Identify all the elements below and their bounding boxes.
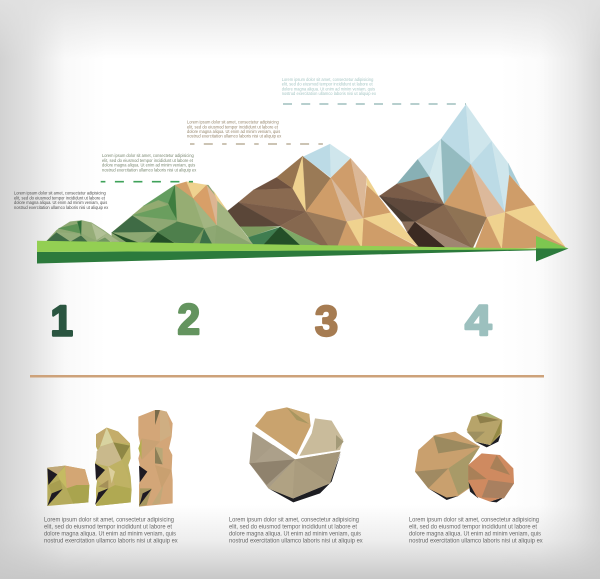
arrow: timeline axis [37,236,568,264]
text block: mountain 1 [14,191,109,210]
text block: mountain 4: dolore magna aliqua. Ut enim ad minim veniam, quis [282,86,375,91]
text block: mountain 2: dolore magna aliqua. Ut enim ad minim veniam, quis [102,163,195,168]
chart: rock bar chart [47,410,173,507]
pie shadow [268,453,341,502]
mountain 2: green hill with tan crest [112,182,253,245]
rock: small olive [467,412,502,447]
text block: mountain 1: Lorem ipsum dolor sit amet, consectetur adipisicing [14,191,106,196]
caption: rock cluster: nostrud exercitation ullamco laboris nisi ut aliquip ex [409,538,543,544]
text block: mountain 4: nostrud exercitation ullamco laboris nisi ut aliquip ex [282,91,377,96]
text block: mountain 4 [282,77,377,96]
text block: mountain 2: elit, sed do eiusmod tempor incididunt ut labore et [102,158,194,163]
mountain 3: snow cap and right face [303,144,418,248]
text block: mountain 1: nostrud exercitation ullamco laboris nisi ut aliquip ex [14,205,109,210]
number 4: 4 [465,297,492,345]
caption: pie chart: dolore magna aliqua. Ut enim ad minim veniam, quis [229,531,361,537]
number 2: 2 [178,296,200,344]
text block: mountain 3: Lorem ipsum dolor sit amet, consectetur adipisicing [187,119,279,124]
text block: mountain 1: dolore magna aliqua. Ut enim ad minim veniam, quis [14,200,107,205]
rock: orange [468,453,514,502]
text block: mountain 3: elit, sed do eiusmod tempor incididunt ut labore et [187,124,279,129]
mountain 1: small green hill [46,220,119,242]
caption: bar chart: Lorem ipsum dolor sit amet, consectetur adipisicing [44,518,174,524]
caption: rock cluster [409,518,543,544]
caption: pie chart [229,518,363,544]
dashed leader line: mountain 3 [190,143,332,145]
caption: pie chart: Lorem ipsum dolor sit amet, consectetur adipisicing [229,518,359,524]
rock: large tan [415,432,480,500]
text block: mountain 1: elit, sed do eiusmod tempor incididunt ut labore et [14,196,106,200]
caption: rock cluster: Lorem ipsum dolor sit amet, consectetur adipisicing [409,518,539,524]
green foothill between mountains 2 and 3 [240,227,323,247]
text block: mountain 2: nostrud exercitation ullamco laboris nisi ut aliquip ex [102,167,197,172]
caption: pie chart: elit, sed do eiusmod tempor incididunt ut labore et [229,525,357,531]
rock bar 3 [138,410,173,507]
rock bar 1 [47,466,89,506]
text block: mountain 3: dolore magna aliqua. Ut enim ad minim veniam, quis [187,129,280,134]
number 1: 1 [50,298,73,346]
caption: rock cluster: elit, sed do eiusmod tempor incididunt ut labore et [409,525,537,531]
rock bar 2 [95,428,132,506]
caption: bar chart: dolore magna aliqua. Ut enim ad minim veniam, quis [44,531,176,537]
dashed leader line: mountain 2 [101,181,193,183]
text block: mountain 3 [187,119,282,139]
pie slice: beige [299,418,344,456]
mountain 3: left brown face [227,156,340,246]
chart: cluster of three rocks [415,412,514,502]
text block: mountain 2 [102,153,197,172]
dashed leader line: mountain 4 [283,103,466,105]
caption: rock cluster: dolore magna aliqua. Ut enim ad minim veniam, quis [409,531,541,537]
text block: mountain 4: elit, sed do eiusmod tempor incididunt ut labore et [282,82,373,87]
caption: bar chart: elit, sed do eiusmod tempor incididunt ut labore et [44,525,172,531]
chart: rock pie chart [249,407,344,502]
section divider line [30,375,544,378]
pie slice: large grey [249,432,341,498]
caption: pie chart: nostrud exercitation ullamco laboris nisi ut aliquip ex [229,538,363,544]
pie slice: tan [255,407,311,455]
caption: bar chart [44,518,178,544]
text block: mountain 4: Lorem ipsum dolor sit amet, consectetur adipisicing [282,77,374,82]
mountain 4: tallest snow peak [379,104,565,249]
caption: bar chart: nostrud exercitation ullamco laboris nisi ut aliquip ex [44,538,178,544]
text block: mountain 3: nostrud exercitation ullamco laboris nisi ut aliquip ex [187,134,282,139]
text block: mountain 2: Lorem ipsum dolor sit amet, consectetur adipisicing [102,153,194,158]
number 3: 3 [315,298,338,346]
